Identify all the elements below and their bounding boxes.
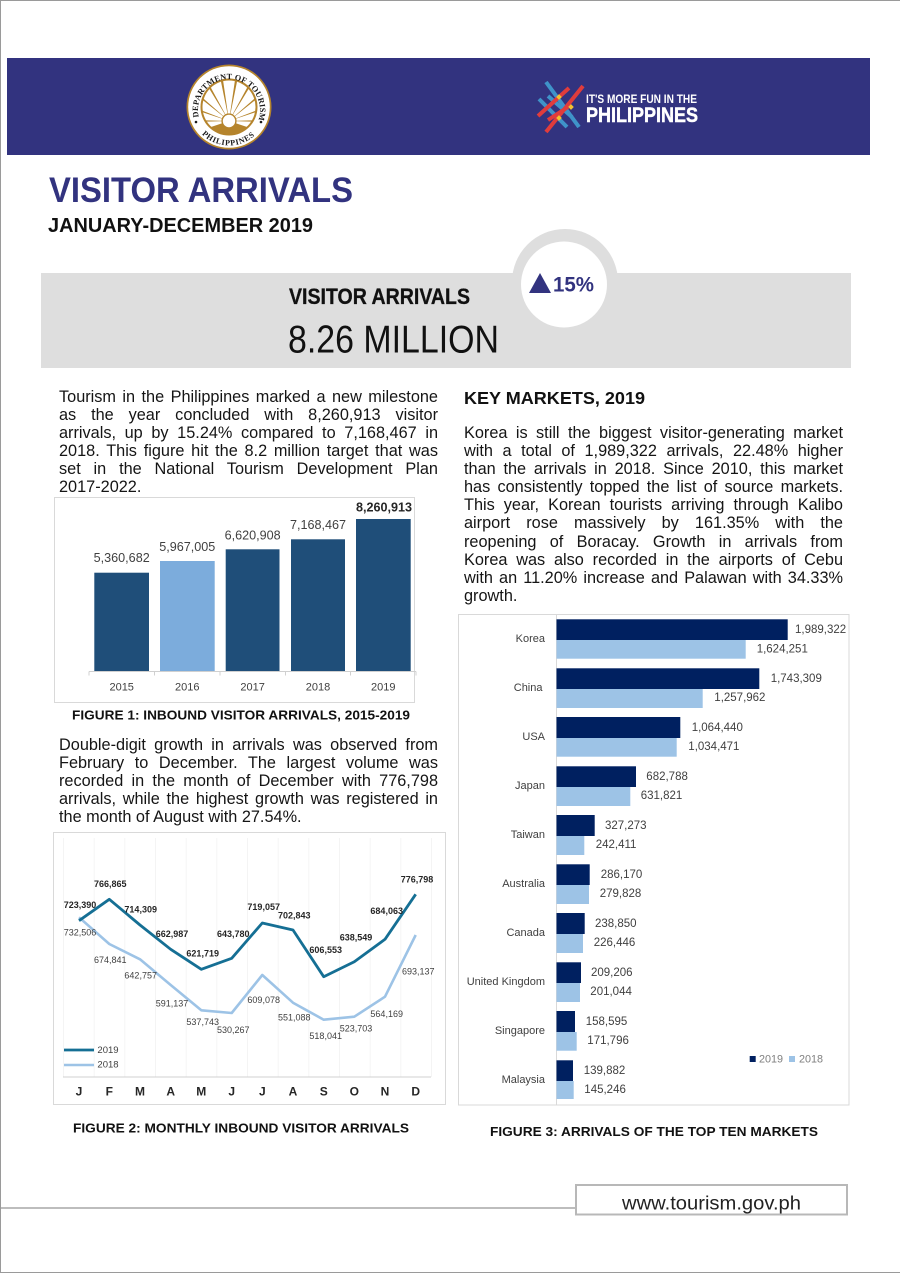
chart: arrivals of the top ten markets: 171,796: [587, 1035, 629, 1047]
chart: monthly inbound visitor arrivals: 766,865: [94, 879, 127, 889]
chart: arrivals of the top ten markets: 1,257,962: [714, 692, 765, 704]
legend: bar chart: 2018: [799, 1054, 823, 1066]
chart: arrivals of the top ten markets: United Kingdom: [467, 976, 545, 988]
legend: line chart: 2018: [97, 1060, 119, 1070]
chart: inbound visitor arrivals 2015-2019: 2019: [371, 682, 396, 694]
caption: figure 3: FIGURE 3: ARRIVALS OF THE TOP TEN MARKETS: [490, 1125, 818, 1139]
footer: www.tourism.gov.ph: [621, 1192, 801, 1214]
chart: monthly inbound visitor arrivals: 776,798: [401, 875, 433, 885]
text block: intro: set in the National Tourism Development Plan: [59, 460, 438, 478]
chart: arrivals of the top ten markets: 631,821: [641, 790, 682, 802]
chart: monthly inbound visitor arrivals: A: [166, 1085, 175, 1099]
chart: inbound visitor arrivals 2015-2019: 2018: [306, 682, 330, 694]
chart: arrivals of the top ten markets: 286,170: [601, 869, 642, 881]
chart: monthly inbound visitor arrivals: O: [350, 1085, 359, 1099]
chart: monthly inbound visitor arrivals: 564,169: [370, 1009, 403, 1019]
chart: monthly inbound visitor arrivals: J: [76, 1085, 82, 1099]
chart: monthly inbound visitor arrivals: 642,757: [124, 971, 157, 981]
text block: key markets: airport rose massively by 161.35% with the: [464, 514, 843, 532]
chart: monthly inbound visitor arrivals: N: [381, 1085, 389, 1099]
chart: monthly inbound visitor arrivals: 662,987: [156, 929, 188, 939]
text block: key markets: This year, Korean tourists arriving through Kalibo: [464, 496, 843, 514]
subtitle: JANUARY-DECEMBER 2019: [48, 214, 313, 237]
chart: arrivals of the top ten markets: 209,206: [591, 967, 633, 979]
text block: key markets: has consistently topped the list of source markets.: [464, 478, 843, 496]
chart: monthly inbound visitor arrivals: 591,137: [156, 999, 188, 1009]
chart: inbound visitor arrivals 2015-2019: 5,967,005: [159, 540, 215, 554]
text block: intro: Tourism in the Philippines marked a new milestone: [59, 388, 438, 406]
caption: figure 1: FIGURE 1: INBOUND VISITOR ARRIVALS, 2015-2019: [72, 708, 410, 722]
legend: bar chart: [750, 1054, 823, 1066]
text block: key markets: reopening of Boracay. Growth in arrivals from: [464, 533, 843, 551]
chart: inbound visitor arrivals 2015-2019: 2015: [109, 682, 134, 694]
legend: line chart: [64, 1045, 119, 1070]
chart: arrivals of the top ten markets: 327,273: [605, 820, 647, 832]
headline label: VISITOR ARRIVALS: [289, 284, 470, 309]
chart: monthly inbound visitor arrivals: 518,041: [309, 1031, 342, 1041]
chart: monthly inbound visitor arrivals: M: [135, 1085, 145, 1099]
chart: monthly inbound visitor arrivals: 674,841: [94, 955, 127, 965]
chart: inbound visitor arrivals 2015-2019: 7,168,467: [290, 518, 346, 532]
headline value: 8.26 MILLION: [288, 318, 499, 362]
chart: monthly inbound visitor arrivals: [54, 832, 446, 1104]
chart: monthly inbound visitor arrivals: 723,390: [64, 900, 96, 910]
text block: monthly growth: February to December. The largest volume was: [59, 754, 438, 772]
caption: figure 2: FIGURE 2: MONTHLY INBOUND VISITOR ARRIVALS: [73, 1122, 409, 1136]
chart: monthly inbound visitor arrivals: 732,506: [64, 927, 96, 937]
chart: arrivals of the top ten markets: 139,882: [584, 1065, 625, 1077]
chart: monthly inbound visitor arrivals: 537,743: [186, 1017, 219, 1027]
title: VISITOR ARRIVALS: [49, 170, 353, 210]
chart: arrivals of the top ten markets: 201,044: [590, 986, 632, 998]
chart: arrivals of the top ten markets: 242,411: [596, 839, 636, 851]
text block: monthly growth: Double-digit growth in arrivals was observed from: [59, 736, 438, 754]
chart: arrivals of the top ten markets: 1,034,471: [688, 741, 739, 753]
legend: line chart: 2019: [97, 1045, 119, 1056]
logo: It's More Fun in the Philippines: [538, 82, 698, 132]
logo: Department of Tourism seal: PHILIPPINES: [202, 130, 254, 146]
text block: key markets: Korea was also recorded in the airports of Cebu: [464, 551, 843, 569]
chart: arrivals of the top ten markets: USA: [522, 731, 546, 743]
text block: key markets: Korea is still the biggest visitor-generating market: [464, 424, 843, 442]
chart: arrivals of the top ten markets: China: [514, 682, 543, 694]
chart: arrivals of the top ten markets: 145,246: [584, 1084, 626, 1096]
text block: intro: [59, 388, 438, 496]
chart: monthly inbound visitor arrivals: 609,078: [247, 995, 280, 1005]
chart: arrivals of the top ten markets: 1,989,322: [795, 624, 846, 636]
chart: arrivals of the top ten markets: 1,064,440: [692, 722, 743, 734]
text block: intro: 2018. This figure hit the 8.2 million target that was: [59, 442, 438, 460]
chart: arrivals of the top ten markets: 238,850: [595, 918, 637, 930]
logo: It's More Fun in the Philippines: IT'S MORE FUN IN THE: [586, 94, 697, 106]
chart: arrivals of the top ten markets: Japan: [515, 780, 545, 792]
icon: up triangle: [529, 273, 551, 293]
chart: monthly inbound visitor arrivals: 606,553: [309, 945, 342, 955]
chart: monthly inbound visitor arrivals: 621,719: [186, 949, 219, 959]
chart: inbound visitor arrivals 2015-2019: 5,360,682: [94, 551, 150, 565]
chart: inbound visitor arrivals 2015-2019: 2016: [175, 682, 200, 694]
legend: bar chart: 2019: [759, 1054, 783, 1066]
chart: inbound visitor arrivals 2015-2019: 8,260,913: [356, 500, 412, 514]
chart: monthly inbound visitor arrivals: 684,063: [370, 906, 403, 916]
text block: key markets: [464, 424, 843, 605]
line: 2018: [79, 917, 416, 1020]
text block: key markets: than the arrivals in 2018. Since 2010, this market: [464, 460, 843, 478]
chart: monthly inbound visitor arrivals: 530,267: [217, 1025, 250, 1035]
chart: monthly inbound visitor arrivals: A: [289, 1085, 298, 1099]
chart: arrivals of the top ten markets: 682,788: [646, 771, 688, 783]
chart: monthly inbound visitor arrivals: 523,703: [340, 1023, 372, 1033]
text block: monthly growth: recorded in the month of December with 776,798: [59, 772, 438, 790]
chart: monthly inbound visitor arrivals: 702,843: [278, 911, 311, 921]
text block: monthly growth: the month of August with 27.54%.: [59, 808, 302, 826]
chart: inbound visitor arrivals 2015-2019: [54, 498, 416, 702]
text block: monthly growth: [59, 736, 438, 826]
chart: monthly inbound visitor arrivals: 643,780: [217, 929, 250, 939]
text block: intro: arrivals, up by 15.24% compared to 7,168,467 in: [59, 424, 438, 442]
chart: monthly inbound visitor arrivals: D: [411, 1085, 420, 1099]
text block: key markets: with a total of 1,989,322 arrivals, 22.48% higher: [464, 442, 843, 460]
chart: arrivals of the top ten markets: [458, 614, 849, 1105]
chart: inbound visitor arrivals 2015-2019: 2017: [240, 682, 265, 694]
logo: Department of Tourism seal: [186, 64, 272, 150]
text block: intro: 2017-2022.: [59, 478, 141, 496]
logo: Department of Tourism seal: DEPARTMENT OF TOURISM: [192, 74, 266, 121]
chart: arrivals of the top ten markets: 279,828: [600, 888, 641, 900]
chart: arrivals of the top ten markets: Singapore: [495, 1025, 545, 1037]
line: 2019: [79, 894, 416, 977]
chart: arrivals of the top ten markets: Canada: [506, 927, 546, 939]
chart: arrivals of the top ten markets: 226,446: [594, 937, 635, 949]
chart: monthly inbound visitor arrivals: 719,057: [247, 902, 280, 912]
chart: arrivals of the top ten markets: 158,595: [586, 1016, 627, 1028]
chart: monthly inbound visitor arrivals: J: [228, 1085, 235, 1099]
header band: [7, 58, 870, 155]
text block: key markets: growth.: [464, 587, 517, 605]
text block: key markets: with an 11.20% increase and Palawan with 34.33%: [464, 569, 843, 587]
chart: monthly inbound visitor arrivals: 693,137: [402, 967, 435, 977]
chart: arrivals of the top ten markets: Taiwan: [511, 829, 545, 841]
chart: arrivals of the top ten markets: Korea: [516, 633, 546, 645]
text block: intro: as the year concluded with 8,260,913 visitor: [59, 406, 438, 424]
chart: monthly inbound visitor arrivals: 714,309: [124, 904, 157, 914]
panel: headline total: [41, 229, 851, 368]
logo: It's More Fun in the Philippines: PHILIPPINES: [586, 104, 698, 127]
chart: arrivals of the top ten markets: 1,743,309: [771, 673, 822, 685]
footer: [1, 1185, 847, 1214]
chart: inbound visitor arrivals 2015-2019: 6,620,908: [225, 528, 281, 542]
chart: arrivals of the top ten markets: Malaysia: [502, 1074, 546, 1086]
text block: monthly growth: arrivals, while the highest growth was registered in: [59, 790, 438, 808]
chart: monthly inbound visitor arrivals: S: [320, 1085, 328, 1099]
chart: monthly inbound visitor arrivals: 551,088: [278, 1013, 311, 1023]
heading: key markets: KEY MARKETS, 2019: [464, 388, 645, 408]
chart: monthly inbound visitor arrivals: M: [196, 1085, 206, 1099]
chart: monthly inbound visitor arrivals: F: [106, 1085, 113, 1099]
chart: arrivals of the top ten markets: Australia: [502, 878, 546, 890]
chart: arrivals of the top ten markets: 1,624,251: [757, 643, 808, 655]
chart: monthly inbound visitor arrivals: J: [259, 1085, 266, 1099]
growth rate: 15%: [553, 274, 594, 296]
chart: monthly inbound visitor arrivals: 638,549: [340, 933, 372, 943]
